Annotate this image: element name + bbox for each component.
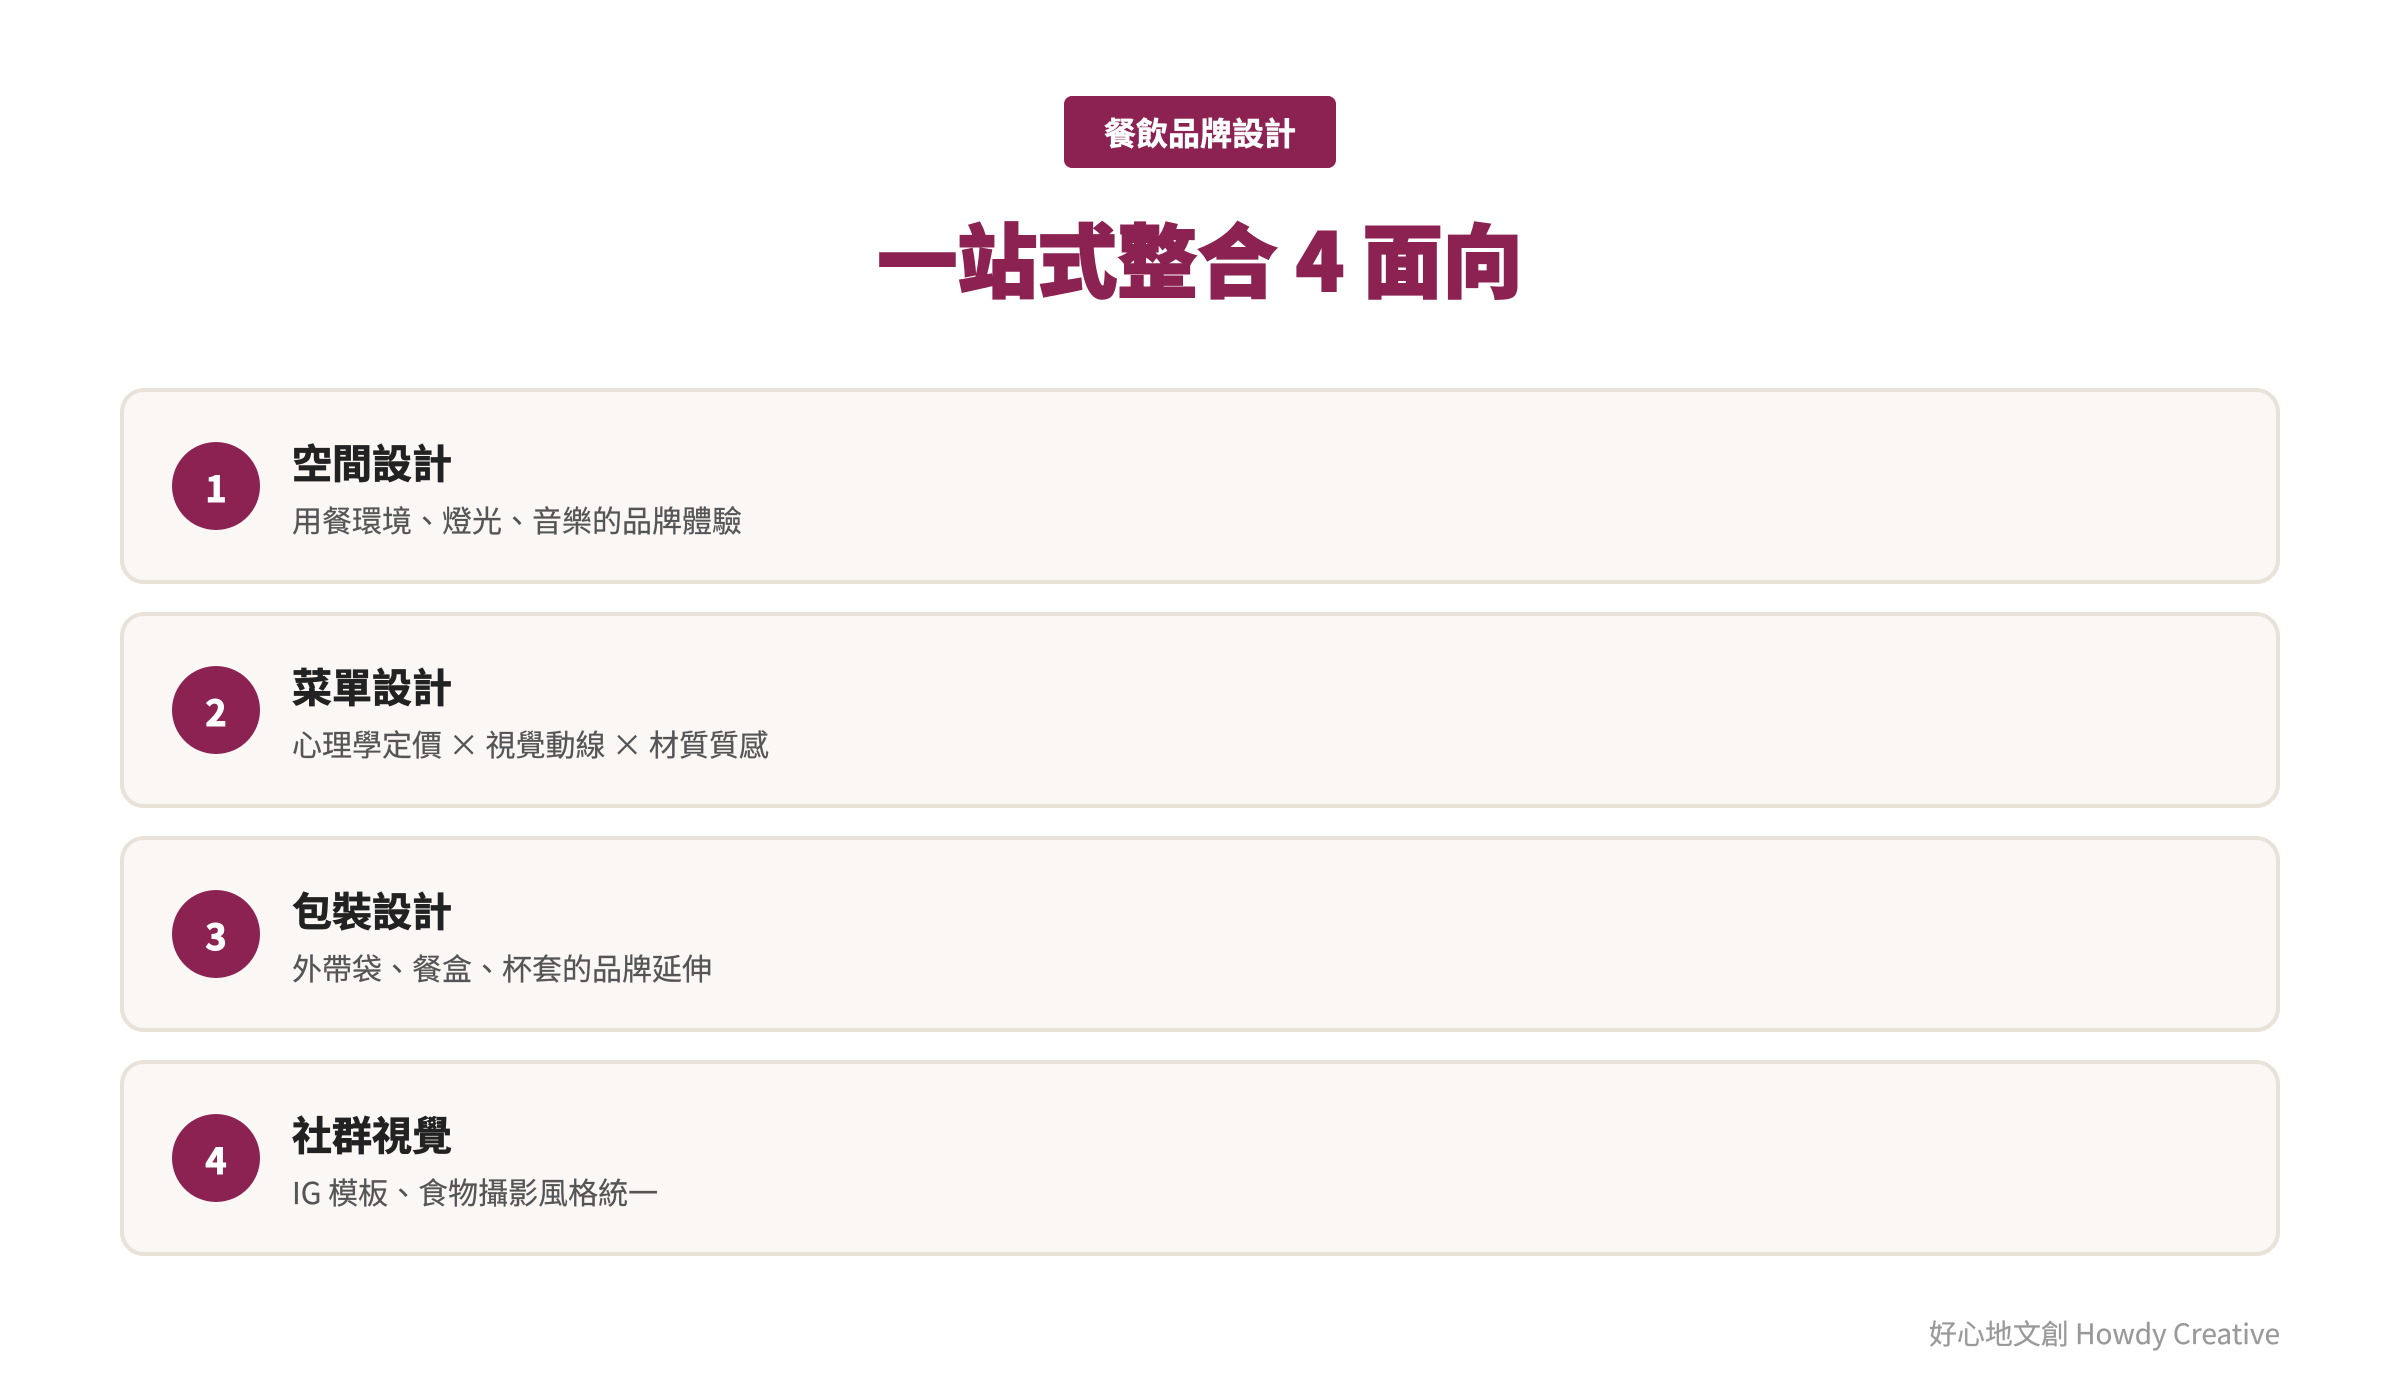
description: menu design: 心理學定價 × 視覺動線 × 材質質感 bbox=[292, 721, 769, 765]
badge bbox=[1064, 96, 1336, 168]
panel: menu design bbox=[120, 612, 2280, 808]
number badge 2 bbox=[172, 666, 260, 754]
text block: space design bbox=[292, 432, 742, 541]
badge: 餐飲品牌設計 bbox=[1104, 109, 1296, 155]
heading: social visuals: 社群視覺 bbox=[292, 1104, 452, 1162]
number badge 1 bbox=[172, 442, 260, 530]
description: space design: 用餐環境、燈光、音樂的品牌體驗 bbox=[292, 497, 742, 541]
panel: packaging design bbox=[120, 836, 2280, 1032]
text block: packaging design bbox=[292, 880, 712, 989]
number badge 3: 3 bbox=[205, 909, 227, 961]
number badge 4 bbox=[172, 1114, 260, 1202]
title: 一站式整合 4 面向 bbox=[877, 199, 1523, 315]
text block: menu design bbox=[292, 656, 769, 765]
number badge 4: 4 bbox=[205, 1133, 227, 1185]
number badge 3 bbox=[172, 890, 260, 978]
panel: social visuals bbox=[120, 1060, 2280, 1256]
description: social visuals: IG 模板、食物攝影風格統一 bbox=[292, 1169, 658, 1213]
text block: social visuals bbox=[292, 1104, 658, 1213]
heading: packaging design: 包裝設計 bbox=[292, 880, 452, 938]
panel: space design bbox=[120, 388, 2280, 584]
heading: menu design: 菜單設計 bbox=[292, 656, 452, 714]
number badge 1: 1 bbox=[205, 461, 227, 513]
footer credit: 好心地文創 Howdy Creative bbox=[1929, 1313, 2280, 1353]
heading: space design: 空間設計 bbox=[292, 432, 452, 490]
number badge 2: 2 bbox=[205, 685, 227, 737]
description: packaging design: 外帶袋、餐盒、杯套的品牌延伸 bbox=[292, 945, 712, 989]
